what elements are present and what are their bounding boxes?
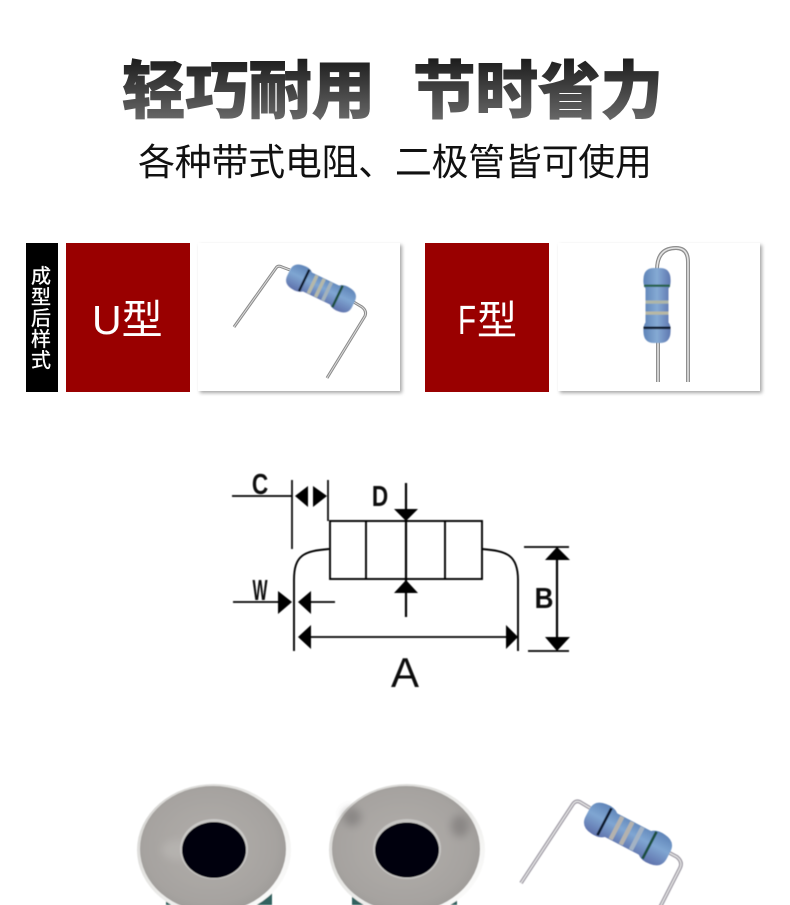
title (122, 57, 663, 127)
dimension diagram (232, 467, 570, 696)
panel: F type label: 型 (477, 299, 517, 343)
side label: forming style: 后 (31, 307, 51, 330)
side label: forming style: 型 (31, 286, 51, 309)
dimension letters: B (535, 582, 553, 614)
title: 节时省力 (413, 57, 663, 127)
side label: forming style: 样 (31, 328, 51, 351)
panel: F type label (425, 243, 549, 392)
panel: U type label (66, 243, 190, 392)
dimension letters: D (372, 479, 388, 513)
dimension letters: C (252, 467, 268, 501)
panel: U type label: U型 (92, 297, 163, 343)
photo: resistor U type large (521, 798, 681, 905)
dimension letters (252, 467, 553, 696)
title: 轻巧耐用 (122, 57, 375, 127)
photo: metal eyelet left (137, 784, 291, 905)
arrowheads (278, 486, 570, 651)
dimension lines (232, 480, 569, 651)
dimension letters: A (391, 649, 419, 696)
side label: forming style: 式 (31, 349, 51, 372)
side label: forming style: 成 (31, 265, 51, 288)
side label: forming style (26, 243, 58, 392)
panel: F type label: F (458, 297, 476, 343)
panel: U type photo (198, 243, 400, 391)
resistor outline (294, 521, 518, 651)
subtitle: 各种带式电阻、二极管皆可使用 (138, 142, 652, 183)
dimension letters: W (252, 574, 268, 606)
photo: metal eyelet right (329, 784, 485, 905)
panel: F type photo (558, 243, 760, 391)
